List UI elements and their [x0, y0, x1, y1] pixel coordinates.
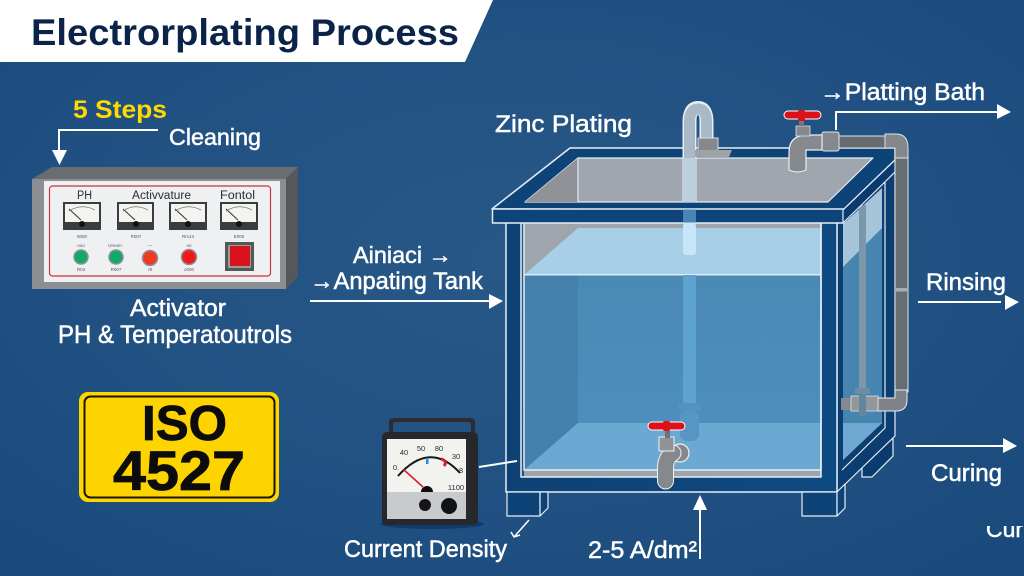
lower side valve: [841, 388, 907, 416]
label: 2-5 A/dm2: 2-5 A/dm²: [588, 537, 697, 564]
pipe bracket: [695, 138, 732, 157]
label: cleaning: Cleaning: [169, 124, 261, 150]
small captions: Rm13: [182, 234, 194, 239]
opening left wall: [525, 158, 578, 202]
small captions: Ureom: [108, 243, 122, 248]
top tap and pipe: [784, 110, 908, 392]
arrow: platting bath: [836, 104, 1011, 130]
label: ainiaci: Ainiaci →: [353, 242, 452, 268]
badge: ISO 4527: 4527: [113, 439, 245, 502]
small captions: [77, 234, 245, 272]
label: curing: Curing: [931, 460, 1002, 487]
label: activator: Activator: [130, 295, 226, 322]
water surface line: [524, 274, 821, 276]
small captions: E000: [234, 234, 245, 239]
badge: ISO 4527: ISO: [142, 397, 227, 451]
water left wall: [524, 275, 578, 470]
rim front: [492, 209, 844, 223]
label: current density: Current Density: [344, 536, 507, 563]
water back surface: [524, 228, 821, 275]
plating tank: [492, 108, 908, 516]
overflow pipe: [683, 108, 706, 255]
small captions: o000: [184, 267, 195, 272]
front tap: [648, 421, 689, 481]
icon: current density meter: 30: [452, 452, 460, 461]
control labels: Fontol: [220, 190, 255, 202]
tank opening: [525, 158, 873, 202]
arrow: up to tank: [693, 495, 707, 559]
label: clipped curing fragment: Cur: [986, 516, 1023, 542]
arrow: into tank: [310, 294, 503, 309]
connector: meter to tank: [479, 461, 517, 467]
arrow: curing: [906, 438, 1017, 453]
icon: current density meter: 50: [417, 444, 425, 453]
title banner: Electrorplating Process: [31, 12, 459, 53]
icon: current density meter: 80: [435, 444, 443, 453]
small captions: ooo: [77, 243, 85, 248]
water floor: [524, 423, 821, 470]
label: pH and temperature controls: PH & Temperatoutrols: [58, 321, 292, 349]
badge: ISO 4527: [79, 392, 279, 502]
label: zinc plating: Zinc Plating: [495, 111, 632, 138]
icon: current density meter: 40: [400, 448, 408, 457]
small captions: —: [148, 243, 153, 248]
analog meters: [63, 202, 258, 230]
label: anpating tank: →Anpating Tank: [310, 268, 484, 295]
front feet: [507, 484, 845, 516]
arrow: rinsing: [918, 295, 1019, 310]
heading: 5 steps: 5 Steps: [73, 96, 167, 124]
small captions: R03: [77, 267, 86, 272]
indicator buttons: [74, 250, 196, 266]
control labels: [77, 190, 255, 202]
pointer: current density: [511, 520, 529, 537]
water body: [524, 275, 821, 470]
red switch: [225, 242, 254, 271]
frame posts and base: [506, 222, 837, 492]
icon: current density meter: 1100: [448, 483, 464, 492]
control labels: PH: [77, 190, 92, 202]
small captions: 8000: [77, 234, 88, 239]
icon: current density meter: [380, 418, 484, 529]
tank interior back wall and gray upper: [524, 223, 821, 477]
title banner: [0, 0, 493, 62]
back feet: [862, 436, 893, 477]
rim top: [492, 148, 895, 210]
small captions: r8: [148, 267, 152, 272]
arrow: cleaning to control panel: [52, 130, 158, 165]
control labels: Activvature: [132, 190, 191, 202]
small captions: R007: [111, 267, 122, 272]
inner submerged pipe: [678, 275, 701, 441]
icon: current density meter: 0.: [393, 463, 399, 472]
panel: control box: [32, 167, 298, 289]
side glass panel: [837, 165, 895, 492]
icon: current density meter: 8: [459, 466, 463, 475]
rim right: [843, 160, 895, 223]
small captions: R007: [131, 234, 142, 239]
small captions: oo: [186, 243, 192, 248]
label: rinsing: Rinsing: [926, 269, 1006, 296]
label: platting bath: →Platting Bath: [820, 79, 985, 106]
